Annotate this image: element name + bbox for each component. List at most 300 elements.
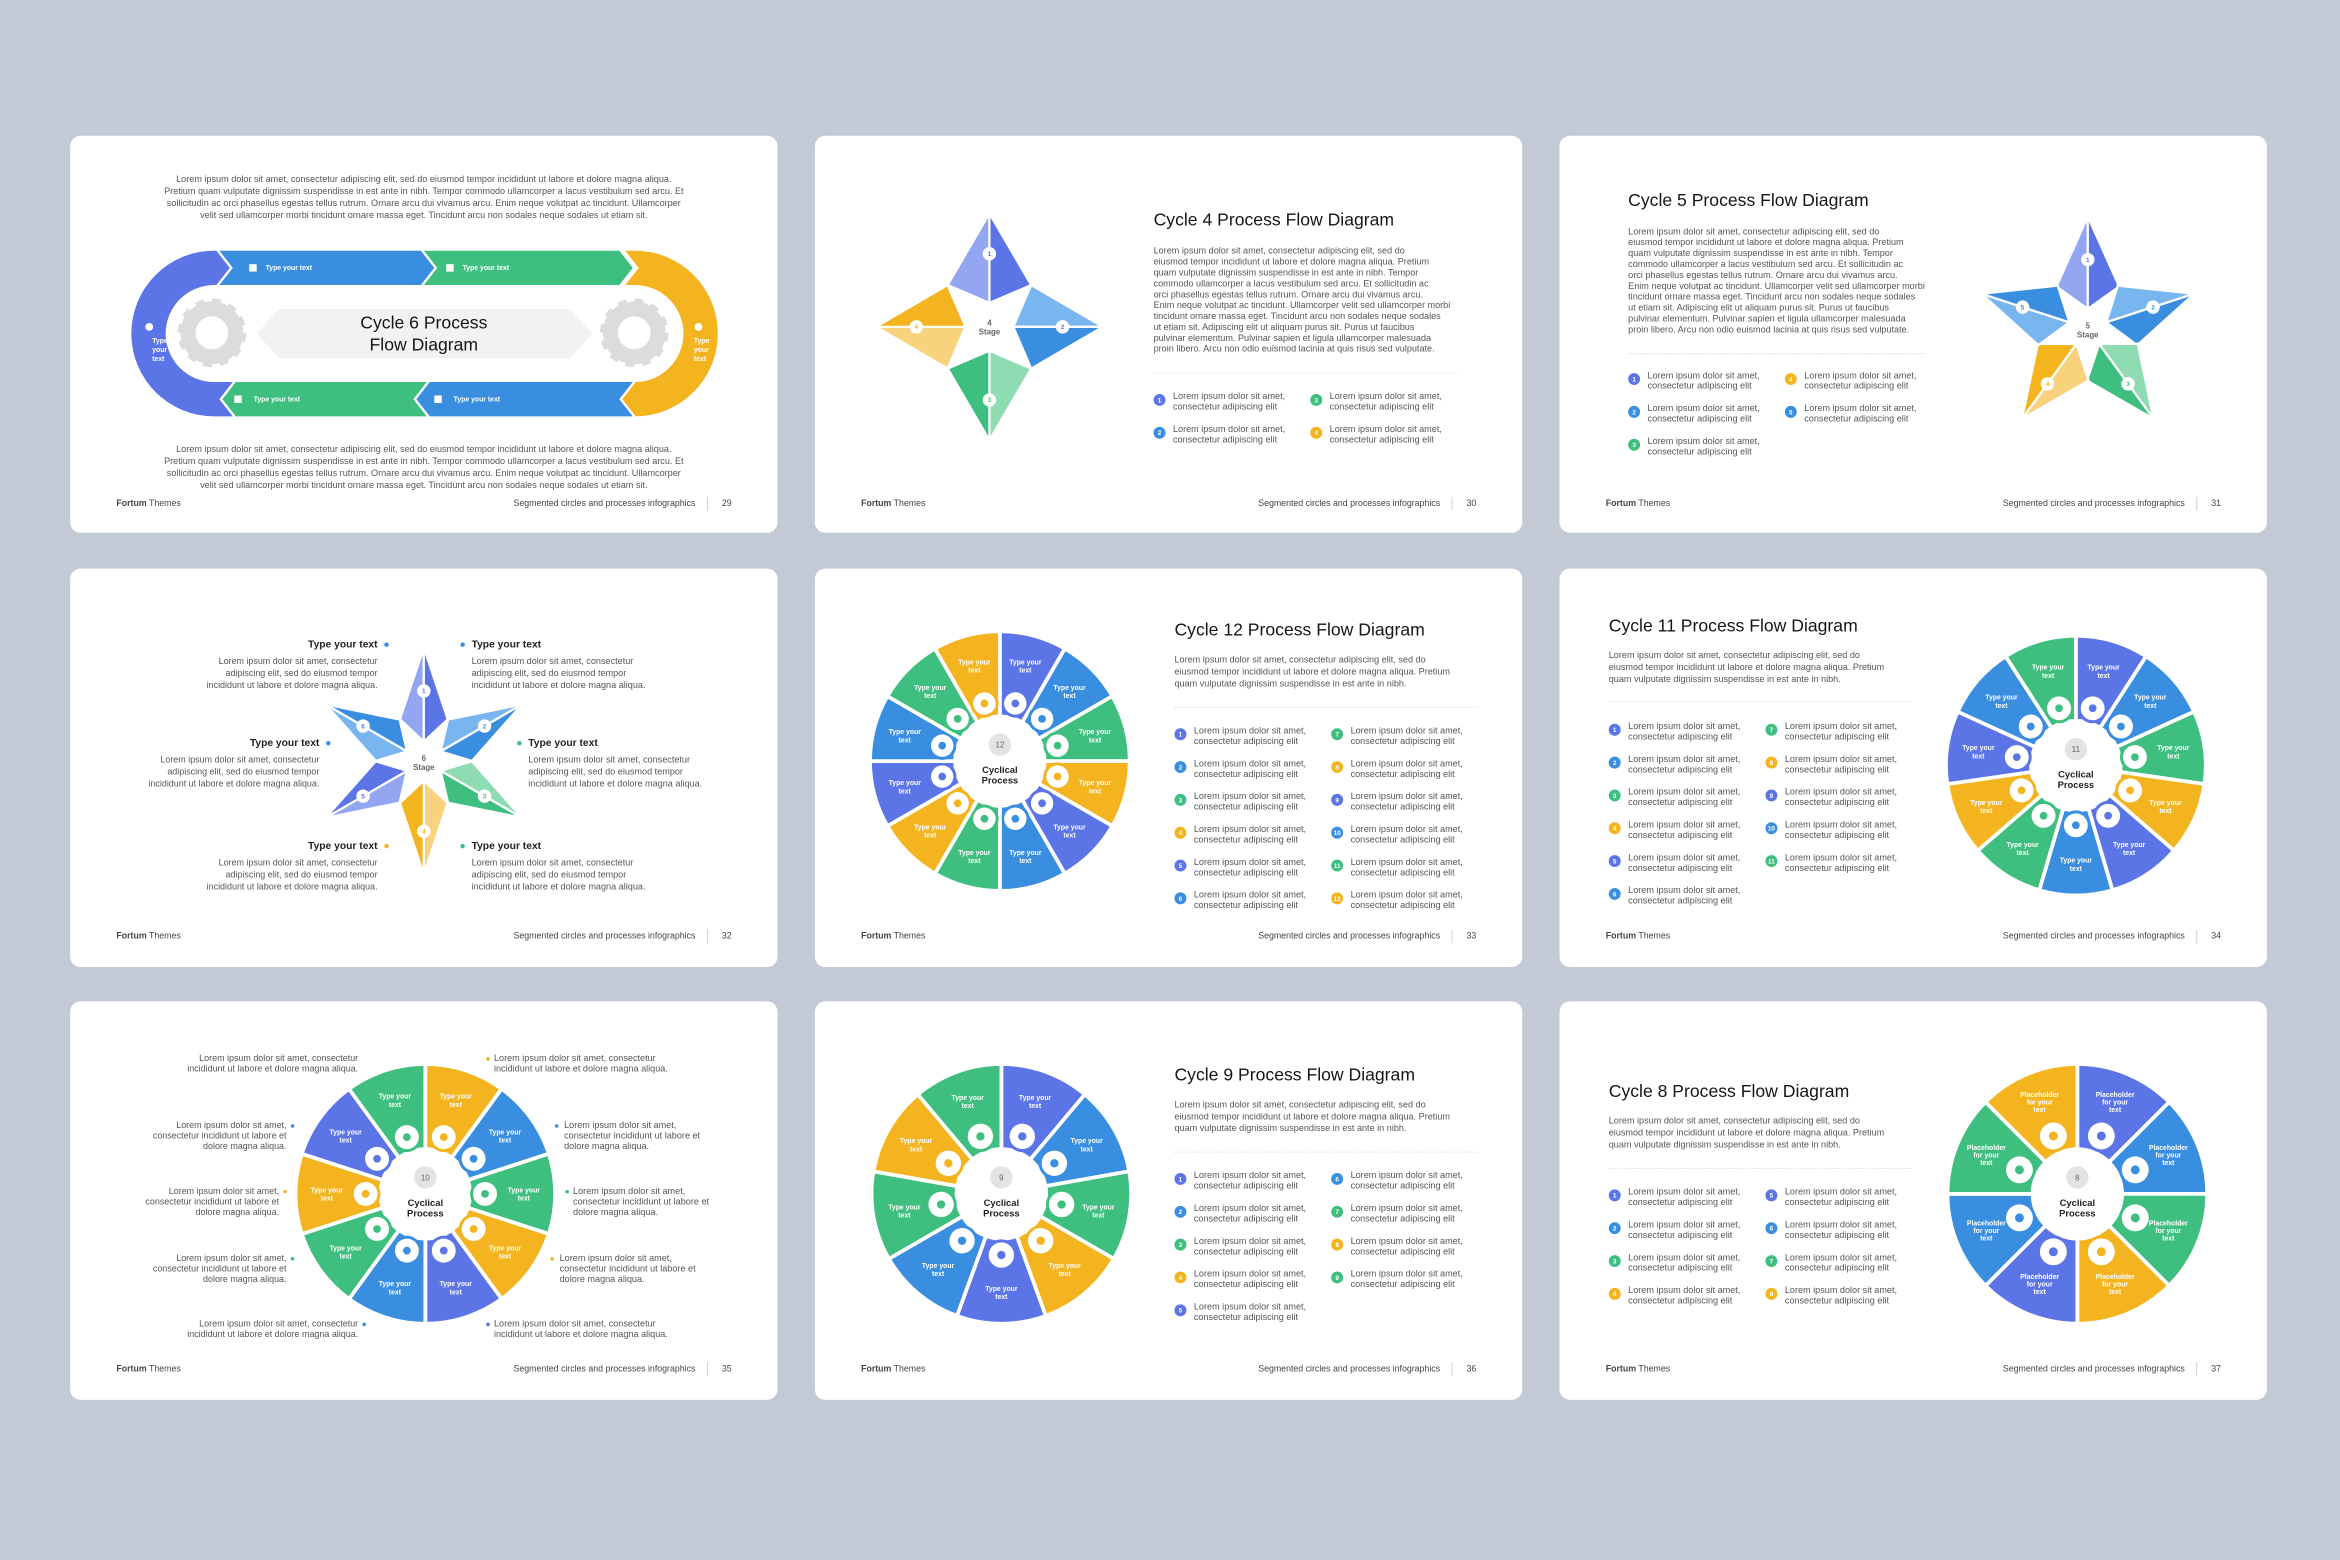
list item 8: Lorem ipsum dolor sit amet, <box>1351 1236 1463 1246</box>
segment 4 <box>2100 750 2209 853</box>
paragraph: pulvinar elementum. Pulvinar sapien et ligula ullamcorper malesuada <box>1628 313 1907 323</box>
footer <box>116 497 732 510</box>
segment 7: Placeholder <box>1967 1145 2006 1152</box>
list item 2: Lorem ipsum dolor sit amet, <box>1628 754 1740 764</box>
center label <box>983 1166 1020 1218</box>
top paragraph: Lorem ipsum dolor sit amet, consectetur adipiscing elit, sed do eiusmod tempor incididunt ut labore et dolore magna aliqua. <box>176 174 672 184</box>
footer: Fortum Themes <box>116 498 181 508</box>
list item 1 <box>1609 721 1740 741</box>
list item 4: 4 <box>1789 376 1793 383</box>
panel: slide 33 cycle 12 <box>815 569 1522 967</box>
label top-right: incididunt ut labore et dolore magna aliqua. <box>472 680 646 690</box>
segment 7 <box>866 1157 968 1260</box>
list item 10: 10 <box>1768 826 1775 833</box>
segment 5: text <box>2034 1289 2046 1296</box>
segment 4 <box>2047 1213 2173 1333</box>
list item 3: Lorem ipsum dolor sit amet, <box>1628 787 1740 797</box>
diagram title <box>360 312 488 355</box>
callout left 2: dolore magna aliqua. <box>203 1141 287 1151</box>
list item 2: 2 <box>1613 1226 1617 1233</box>
callout left 3: Lorem ipsum dolor sit amet, <box>169 1186 279 1196</box>
list item 1: consectetur adipiscing elit <box>1628 1197 1733 1207</box>
segment 6 <box>2039 809 2112 895</box>
arm 3 <box>2074 326 2179 437</box>
segment 2: text <box>2162 1160 2175 1167</box>
segment 9 <box>1942 711 2039 796</box>
list item 5: Lorem ipsum dolor sit amet, <box>1194 857 1306 867</box>
list item 5: consectetur adipiscing elit <box>1785 1197 1889 1207</box>
cycle loop diagram <box>131 251 718 416</box>
center label: 10 <box>421 1173 430 1182</box>
footer <box>1606 1363 2221 1376</box>
segment 6: Type your <box>379 1281 411 1288</box>
list item 6 <box>1331 1170 1463 1191</box>
footer: Fortum Themes <box>861 498 926 508</box>
list item 5 <box>1174 857 1306 877</box>
right arc segment <box>622 251 718 416</box>
segment 8 <box>1943 750 2052 853</box>
list item 10: 10 <box>1334 830 1341 837</box>
four point star diagram <box>876 213 1103 440</box>
list item 2 <box>1174 758 1306 779</box>
center label: Process <box>983 1207 1020 1218</box>
panel: slide 32 cycle 6 star <box>70 569 778 967</box>
list item 8: 8 <box>1770 760 1774 767</box>
list item 6: 6 <box>1179 896 1183 903</box>
segment 1: for your <box>2102 1099 2128 1106</box>
center label: Process <box>407 1207 444 1218</box>
list item 7 <box>1331 1203 1463 1223</box>
callout right 1: incididunt ut labore et dolore magna aliqua. <box>494 1064 668 1074</box>
left arc segment: Type <box>152 338 168 345</box>
panel: slide 31 cycle 5 <box>1560 136 2267 533</box>
label bottom-left <box>207 841 389 891</box>
paragraph: ut etiam sit. Adipiscing elit ut aliquam purus sit. Purus ut faucibus <box>1154 322 1415 332</box>
list item 12: Lorem ipsum dolor sit amet, <box>1351 890 1463 900</box>
paragraph: Lorem ipsum dolor sit amet, consectetur adipiscing elit, sed do <box>1154 246 1405 256</box>
segment 7: Type your <box>958 850 991 857</box>
list item 10: Lorem ipsum dolor sit amet, <box>1785 820 1897 830</box>
callout left 3: consectetur incididunt ut labore et <box>145 1196 280 1206</box>
label top-right: Lorem ipsum dolor sit amet, consectetur <box>472 656 633 666</box>
list item 6: consectetur adipiscing elit <box>1628 896 1733 906</box>
segment 8: text <box>910 1146 923 1153</box>
list item 1: Lorem ipsum dolor sit amet, <box>1173 391 1285 401</box>
paragraph: ut etiam sit. Adipiscing elit ut aliquam purus sit. Purus ut faucibus <box>1628 303 1889 313</box>
paragraph: Lorem ipsum dolor sit amet, consectetur adipiscing elit, sed do <box>1174 1099 1426 1109</box>
segment 12: text <box>968 668 981 675</box>
label top-left: adipiscing elit, sed do eiusmod tempor <box>226 668 378 678</box>
list item 7 <box>1765 1252 1897 1273</box>
list item 9: consectetur adipiscing elit <box>1785 797 1889 807</box>
list item 11: 11 <box>1768 858 1775 865</box>
callout right 3: dolore magna aliqua. <box>573 1207 658 1217</box>
list item 7: 7 <box>1770 1258 1774 1265</box>
list item 3: 3 <box>1314 397 1318 404</box>
segment 1 <box>2047 1055 2173 1175</box>
list item 10: consectetur adipiscing elit <box>1785 830 1889 840</box>
list item 8: Lorem ipsum dolor sit amet, <box>1785 754 1897 764</box>
segment 11: text <box>2042 673 2055 680</box>
list item 3 <box>1310 391 1442 412</box>
segment 11 <box>884 646 993 754</box>
footer: Fortum Themes <box>116 931 181 941</box>
callout left 3: dolore magna aliqua. <box>196 1207 279 1217</box>
segment 3: Type your <box>1079 729 1111 736</box>
footer: Segmented circles and processes infographics <box>2003 1363 2185 1373</box>
segment 8 <box>884 768 993 877</box>
center label: Cyclical <box>408 1197 443 1208</box>
segment 4: Type your <box>489 1245 521 1252</box>
list item 6: 6 <box>1613 891 1617 898</box>
list item 3 <box>1174 1236 1306 1256</box>
label top-right: adipiscing elit, sed do eiusmod tempor <box>472 668 626 678</box>
list item 3 <box>1609 787 1740 807</box>
callout left 4: consectetur incididunt ut labore et <box>153 1263 287 1273</box>
list item 6: Lorem ipsum dolor sit amet, <box>1351 1170 1463 1180</box>
list item 1: 1 <box>1179 1176 1183 1183</box>
center label: 12 <box>995 741 1004 750</box>
list item 2 <box>1154 424 1285 444</box>
bottom paragraph: Pretium quam vulputate dignissim suspendisse in est ante in nibh. Tempor commodo ullamcorper a lacus vestibulum sed arcu. Et <box>164 456 684 466</box>
segment 2: Type your <box>2134 695 2167 702</box>
list item 2: 2 <box>1613 760 1617 767</box>
panel: slide 34 cycle 11 <box>1560 569 2267 967</box>
segment 3: for your <box>2155 1228 2182 1235</box>
paragraph <box>1609 650 1884 684</box>
arm 4: 4 <box>2046 381 2050 388</box>
list item 7 <box>1765 721 1897 741</box>
list <box>1174 725 1463 910</box>
list item 4: Lorem ipsum dolor sit amet, <box>1804 370 1916 380</box>
segment 4: text <box>1059 1271 1071 1278</box>
list item 1: consectetur adipiscing elit <box>1194 1181 1298 1191</box>
segment 7: text <box>340 1253 352 1260</box>
paragraph <box>1174 655 1450 688</box>
segment 2: text <box>1081 1146 1093 1153</box>
callout right 3: Lorem ipsum dolor sit amet, <box>573 1186 685 1196</box>
list item 6: consectetur adipiscing elit <box>1194 900 1298 910</box>
right arc segment: Type <box>694 338 710 345</box>
center label: 11 <box>2072 745 2080 754</box>
callout right 2: consectetur incididunt ut labore et <box>564 1131 701 1141</box>
segment 3: text <box>1089 737 1102 744</box>
callout left 1: incididunt ut labore et dolore magna aliqua. <box>187 1064 358 1074</box>
list item 8: consectetur adipiscing elit <box>1785 764 1889 774</box>
list item 5: 5 <box>1179 1308 1183 1315</box>
callout right 5 <box>486 1319 668 1339</box>
top paragraph: Pretium quam vulputate dignissim suspendisse in est ante in nibh. Tempor commodo ullamcorper a lacus vestibulum sed arcu. Et <box>164 186 684 196</box>
list item 3: consectetur adipiscing elit <box>1194 1246 1298 1256</box>
list item 8: consectetur adipiscing elit <box>1351 769 1455 779</box>
top band segment green <box>424 251 633 285</box>
list item 8: Lorem ipsum dolor sit amet, <box>1785 1285 1897 1295</box>
list <box>1609 1187 1897 1306</box>
list item 5: 5 <box>1770 1193 1774 1200</box>
bottom paragraph <box>164 444 684 490</box>
footer: Segmented circles and processes infographics <box>2003 498 2185 508</box>
label top-left: incididunt ut labore et dolore magna aliqua. <box>207 680 378 690</box>
segment 3: Type your <box>2157 745 2190 752</box>
title: Cycle 8 Process Flow Diagram <box>1609 1081 1849 1101</box>
segment 2: for your <box>2155 1153 2182 1160</box>
label middle-right: incididunt ut labore et dolore magna aliqua. <box>528 778 702 788</box>
segment 8: Type your <box>311 1187 343 1194</box>
panel: slide 35 cycle 10 <box>70 1001 778 1400</box>
list item 9: consectetur adipiscing elit <box>1351 802 1455 812</box>
right arc segment: your <box>694 347 709 354</box>
list item 9 <box>1331 1269 1463 1289</box>
list item 1: Lorem ipsum dolor sit amet, <box>1194 1170 1306 1180</box>
arm 3: 3 <box>988 397 992 404</box>
segment 1 <box>400 1058 504 1166</box>
list item 4: 4 <box>1314 430 1318 437</box>
segment 7: Type your <box>888 1204 921 1211</box>
segment 7: text <box>2016 850 2029 857</box>
paragraph: eiusmod tempor incididunt ut labore et dolore magna aliqua. Pretium <box>1154 257 1429 267</box>
segment 10: text <box>899 737 912 744</box>
list item 1: consectetur adipiscing elit <box>1628 731 1733 741</box>
segment 5: text <box>995 1294 1008 1301</box>
segment 4: text <box>2159 808 2172 815</box>
footer: 34 <box>2211 931 2221 941</box>
callout right 1 <box>486 1053 668 1074</box>
label middle-right: Type your text <box>528 738 598 749</box>
callout left 4: dolore magna aliqua. <box>203 1274 287 1284</box>
segment 6 <box>1938 1164 2058 1289</box>
bottom band segment blue <box>416 382 633 416</box>
paragraph: tincidunt ornare massa eget. Tincidunt arcu non sodales neque sodales <box>1154 311 1441 321</box>
list item 1 <box>1628 370 1760 391</box>
footer <box>1606 930 2221 943</box>
center label: Cyclical <box>2058 769 2094 780</box>
callout right 3: consectetur incididunt ut labore et <box>573 1196 710 1206</box>
label bottom-left: incididunt ut labore et dolore magna aliqua. <box>207 881 378 891</box>
callout right 5: Lorem ipsum dolor sit amet, consectetur <box>494 1319 656 1329</box>
list item 6: 6 <box>1335 1176 1339 1183</box>
segment 9 <box>915 1057 1029 1170</box>
list item 3: 3 <box>1632 442 1636 449</box>
list item 2: consectetur adipiscing elit <box>1628 764 1733 774</box>
center banner <box>257 309 592 358</box>
list item 4: Lorem ipsum dolor sit amet, <box>1330 424 1442 434</box>
title: Cycle 9 Process Flow Diagram <box>1174 1064 1415 1084</box>
paragraph: quam vulputate dignissim suspendisse in est ante in nibh. Tempor <box>1628 248 1893 258</box>
callout right 1: Lorem ipsum dolor sit amet, consectetur <box>494 1053 656 1063</box>
list item 1: 1 <box>1179 732 1183 739</box>
arm 5: 5 <box>2021 304 2025 311</box>
list item 1: Lorem ipsum dolor sit amet, <box>1628 1187 1740 1197</box>
segment 5 <box>2068 782 2177 895</box>
segment 5: for your <box>2027 1281 2053 1288</box>
list item 1: 1 <box>1613 727 1617 734</box>
arm 1: 1 <box>988 251 992 258</box>
list item 2 <box>1174 1203 1306 1223</box>
list item 5: consectetur adipiscing elit <box>1628 863 1733 873</box>
arm 2 <box>2097 264 2204 352</box>
top band segment blue: Type your text <box>266 265 313 272</box>
list item 5: Lorem ipsum dolor sit amet, <box>1804 403 1916 413</box>
segment 8: text <box>321 1196 334 1203</box>
footer: 29 <box>722 498 732 508</box>
segment 8: Placeholder <box>2020 1092 2059 1099</box>
arm 4 <box>400 780 448 875</box>
center label <box>2077 321 2099 339</box>
list item 7: Lorem ipsum dolor sit amet, <box>1351 725 1463 735</box>
bottom paragraph: velit sed ullamcorper morbi tincidunt ornare massa eget. Tincidunt arcu non sodales neque sodales ut etiam sit. <box>200 480 648 490</box>
list item 5: 5 <box>1613 858 1617 865</box>
list item 2 <box>1628 403 1760 424</box>
list item 7: consectetur adipiscing elit <box>1351 736 1455 746</box>
segment 11: Type your <box>2032 665 2065 672</box>
segment 8: Type your <box>1970 800 2003 807</box>
list item 12: 12 <box>1334 896 1341 903</box>
footer: Fortum Themes <box>861 931 926 941</box>
list item 7: consectetur adipiscing elit <box>1351 1213 1455 1223</box>
footer: Segmented circles and processes infographics <box>514 1363 696 1373</box>
label bottom-right: Lorem ipsum dolor sit amet, consectetur <box>472 858 633 868</box>
segment 5: text <box>450 1289 463 1296</box>
segment 1: text <box>1029 1103 1042 1110</box>
list item 2 <box>1609 754 1740 774</box>
list item 4: Lorem ipsum dolor sit amet, <box>1628 820 1740 830</box>
label bottom-left: Lorem ipsum dolor sit amet, consectetur <box>219 858 378 868</box>
segment 5 <box>1007 768 1115 877</box>
list item 8 <box>1765 1285 1897 1306</box>
paragraph: eiusmod tempor incididunt ut labore et dolore magna aliqua. Pretium <box>1609 662 1884 672</box>
list <box>1609 721 1897 906</box>
list item 9: 9 <box>1335 797 1339 804</box>
center label: Cyclical <box>2060 1197 2095 1208</box>
callout right 4: Lorem ipsum dolor sit amet, <box>560 1253 672 1263</box>
arm 3 <box>429 750 534 838</box>
list item 1: Lorem ipsum dolor sit amet, <box>1194 725 1306 735</box>
bottom paragraph: sollicitudin ac orci phasellus egestas tellus rutrum. Ornare arcu dui vivamus arcu. Enim neque volutpat ac tincidunt. Ullamcorper <box>167 468 681 478</box>
list item 4: Lorem ipsum dolor sit amet, <box>1194 824 1306 834</box>
segment 6: Placeholder <box>1967 1221 2006 1228</box>
wheel 11 segments <box>1942 631 2210 895</box>
arm 4 <box>876 285 966 369</box>
segment 9 <box>866 740 967 827</box>
segment 6: text <box>2070 866 2083 873</box>
list item 6 <box>1609 885 1740 906</box>
segment 11: text <box>924 693 937 700</box>
paragraph <box>1628 226 1925 334</box>
arm 3: 3 <box>2126 381 2130 388</box>
segment 10: Type your <box>1985 695 2018 702</box>
segment 2 <box>2084 653 2198 765</box>
list item 4: consectetur adipiscing elit <box>1194 834 1298 844</box>
list item 6: 6 <box>1770 1226 1774 1233</box>
left arc segment <box>131 251 233 416</box>
arm 1: 1 <box>2086 257 2090 264</box>
segment 4: Placeholder <box>2096 1274 2135 1281</box>
list item 2: 2 <box>1179 1209 1183 1216</box>
list item 1: 1 <box>1158 397 1162 404</box>
footer: Fortum Themes <box>1606 498 1671 508</box>
list item 4: Lorem ipsum dolor sit amet, <box>1628 1285 1740 1295</box>
center label: Stage <box>413 763 435 772</box>
segment 8: for your <box>2027 1099 2053 1106</box>
title: Cycle 4 Process Flow Diagram <box>1154 209 1394 229</box>
segment 2 <box>1007 646 1115 754</box>
list item 4 <box>1609 1285 1740 1306</box>
segment 4: for your <box>2102 1281 2128 1288</box>
footer <box>861 1363 1476 1376</box>
segment 1 <box>974 1057 1088 1170</box>
segment 9: Type your <box>329 1129 362 1136</box>
list item 2: Lorem ipsum dolor sit amet, <box>1194 1203 1306 1213</box>
label bottom-left: adipiscing elit, sed do eiusmod tempor <box>226 870 378 880</box>
list item 3 <box>1609 1252 1740 1273</box>
panel: slide 29 cycle 6 <box>70 136 778 533</box>
footer: Fortum Themes <box>116 1363 181 1373</box>
segment 8: text <box>2034 1107 2046 1114</box>
list item 4: consectetur adipiscing elit <box>1628 830 1733 840</box>
label top-left: Lorem ipsum dolor sit amet, consectetur <box>219 656 378 666</box>
segment 12: Type your <box>958 659 991 666</box>
list item 9: consectetur adipiscing elit <box>1351 1279 1455 1289</box>
list item 1 <box>1174 725 1306 746</box>
footer: Segmented circles and processes infographics <box>1258 1363 1441 1373</box>
footer: 31 <box>2211 498 2221 508</box>
title: Cycle 5 Process Flow Diagram <box>1628 190 1869 210</box>
segment 2: Type your <box>1053 685 1086 692</box>
center label: 9 <box>999 1173 1004 1182</box>
footer: 33 <box>1467 931 1476 941</box>
bottom band segment blue: Type your text <box>454 396 501 403</box>
paragraph: Lorem ipsum dolor sit amet, consectetur adipiscing elit, sed do <box>1174 655 1426 665</box>
segment 5: Type your <box>985 1286 1018 1293</box>
segment 6: text <box>1980 1236 1993 1243</box>
segment 2: text <box>2144 703 2157 710</box>
segment 10 <box>347 1058 450 1166</box>
arm 4: 4 <box>915 324 919 331</box>
paragraph: quam vulputate dignissim suspendisse in est ante in nibh. <box>1174 678 1407 688</box>
list item 11: consectetur adipiscing elit <box>1785 863 1889 873</box>
label middle-left: Type your text <box>250 738 320 749</box>
segment 6: Type your <box>922 1263 955 1270</box>
label middle-left: incididunt ut labore et dolore magna aliqua. <box>148 778 319 788</box>
callout left 5: incididunt ut labore et dolore magna aliqua. <box>187 1329 358 1339</box>
list item 9: Lorem ipsum dolor sit amet, <box>1351 791 1463 801</box>
bottom paragraph: Lorem ipsum dolor sit amet, consectetur adipiscing elit, sed do eiusmod tempor incididunt ut labore et dolore magna aliqua. <box>176 444 672 454</box>
paragraph <box>1154 246 1450 354</box>
segment 2: Type your <box>1071 1138 1103 1145</box>
center label <box>982 733 1018 785</box>
top band segment blue <box>219 251 434 285</box>
arm 1 <box>400 648 448 742</box>
paragraph: proin libero. Arcu non odio euismod lacinia at quis risus sed vulputate. <box>1628 324 1909 334</box>
segment 4: text <box>2109 1289 2122 1296</box>
segment 6 <box>884 1198 1008 1322</box>
segment 2: Placeholder <box>2149 1145 2188 1152</box>
list item 4: Lorem ipsum dolor sit amet, <box>1194 1269 1306 1279</box>
callout left 1: Lorem ipsum dolor sit amet, consectetur <box>199 1053 358 1063</box>
list item 11: 11 <box>1334 863 1341 870</box>
callout right 2: dolore magna aliqua. <box>564 1141 649 1151</box>
center label: Cyclical <box>982 764 1018 775</box>
list item 12: consectetur adipiscing elit <box>1351 900 1455 910</box>
list item 9: Lorem ipsum dolor sit amet, <box>1785 787 1897 797</box>
panel: slide 37 cycle 8 <box>1560 1001 2267 1400</box>
label bottom-right: Type your text <box>472 841 542 852</box>
list item 1: Lorem ipsum dolor sit amet, <box>1648 370 1760 380</box>
segment 9: Type your <box>952 1095 984 1102</box>
callout left 4 <box>153 1253 294 1284</box>
segment 5 <box>400 1222 504 1330</box>
list item 4 <box>1609 820 1740 840</box>
